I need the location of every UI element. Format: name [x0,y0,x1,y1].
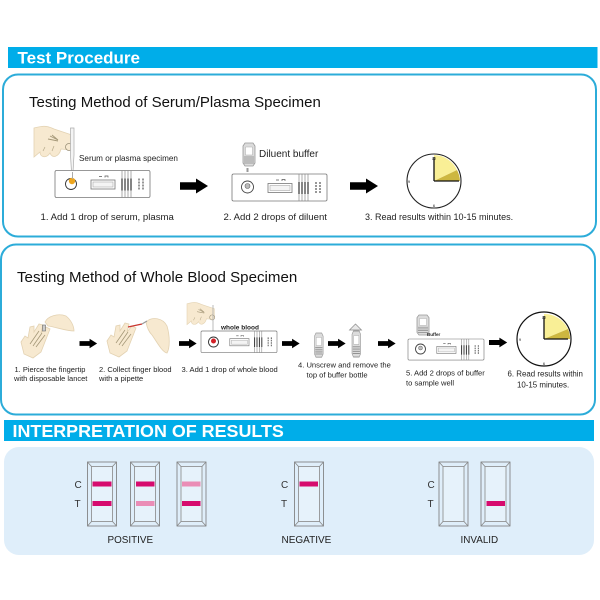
caption step 2: 2. Add 2 drops of diluent [224,212,327,223]
icon: clock 2: 12 [542,315,547,320]
icon: clock 2 [517,312,571,366]
heading bar: Test Procedure: Test Procedure [18,48,140,68]
strip: invalid 2 [481,462,510,526]
label: invalid: INVALID [460,535,498,546]
strip: positive 2 [130,462,160,526]
panel: results [4,447,594,555]
label: negative: NEGATIVE [282,535,332,546]
caption 1: with disposable lancet [13,374,88,383]
arrow b [179,339,197,348]
panel: whole blood method [1,244,595,414]
caption 6: 6. Read results within [508,370,583,378]
label: serum or plasma specimen: Serum or plasma specimen [79,154,178,163]
icon: clock 2: 6 [543,361,546,366]
arrow d [328,339,346,348]
labels C T, invalid: T [428,499,434,510]
heading: whole blood: Testing Method of Whole Blood Specimen [17,269,297,286]
heading bar: interpretation of results: INTERPRETATION OF RESULTS [12,421,284,441]
caption 2: with a pipette [98,374,143,383]
labels C T, positive [74,480,82,510]
heading bar: Test Procedure [8,47,598,68]
strip: invalid 1 [439,462,468,526]
labels C T, positive: T [74,499,81,510]
icon: clock: 6 [433,203,436,208]
icon: clock: 12 [432,156,437,161]
icon: hand and blood drop cassette [187,302,277,353]
caption 2: 2. Collect finger blood [99,365,172,374]
strip: positive 1 [88,462,116,526]
icon: diluent bottle [243,143,255,172]
labels C T, positive: C [74,480,82,491]
icon: closed buffer bottle [314,333,323,357]
icon: pipette hands [107,319,169,357]
icon: clock [407,154,461,208]
labels C T, negative: C [281,480,288,491]
label: positive: POSITIVE [108,535,153,546]
cassette step 2 [232,174,327,201]
panel: serum/plasma method [3,74,596,236]
label: diluent buffer: Diluent buffer [259,149,319,160]
caption 1: 1. Pierce the fingertip [14,365,85,374]
icon: open buffer bottle [350,324,362,357]
caption 5: 5. Add 2 drops of buffer [406,368,485,378]
arrow a [80,339,97,348]
labels C T, invalid [428,480,435,510]
caption step 3: 3. Read results within 10-15 minutes. [365,212,513,222]
icon: clock 2: 9 [519,337,522,342]
caption 4: top of buffer bottle [306,370,368,380]
icon: buffer bottle above cassette [408,315,484,360]
cassette step 1 [55,170,150,198]
labels C T, negative [281,480,288,510]
heading: serum/plasma: Testing Method of Serum/Plasma Specimen [29,94,321,111]
labels C T, invalid: C [428,480,435,491]
icon: hand with dropper [34,126,74,172]
caption 3: 3. Add 1 drop of whole blood [182,365,278,374]
label: whole blood: whole blood [220,324,259,332]
arrow e [378,339,396,348]
caption step 1: 1. Add 1 drop of serum, plasma [40,212,174,223]
caption 5: to sample well [406,378,454,388]
arrow 2 [350,178,378,194]
label: buffer: Buffer [427,332,440,337]
strip: negative [294,462,324,526]
strip: positive 3 [177,462,206,526]
heading bar: interpretation of results [4,420,594,441]
icon: lancet hands [21,315,74,358]
caption 6: 10-15 minutes. [517,380,569,390]
icon: clock: 9 [408,179,411,184]
labels C T, negative: T [281,499,287,510]
arrow 1 [180,178,208,194]
arrow c [282,339,300,348]
arrow f [489,338,507,347]
caption 4: 4. Unscrew and remove the [298,360,391,370]
